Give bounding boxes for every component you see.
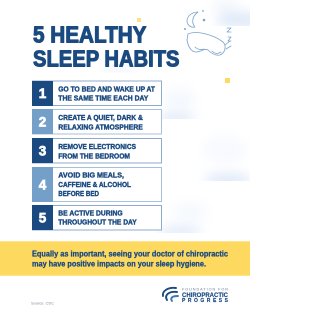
panel: habit 1: GO TO BED AND WAKE UP AT [58,85,155,94]
callout band: Equally as important, seeing your doctor of chiropractic [32,250,228,259]
panel: habit 5: 5 [39,210,47,226]
panel: habit 5: THROUGHOUT THE DAY [58,218,137,227]
panel: habit 3: REMOVE ELECTRONICS [58,142,136,151]
icon: yellow star top [137,18,141,22]
logo: Foundation for Chiropractic Progress: FOUNDATION FOR [182,287,228,291]
panel: habit 5 [32,205,162,230]
panel: habit 1 [32,81,162,106]
panel: habit 4: 4 [39,178,47,192]
logo: Foundation for Chiropractic Progress [163,287,229,304]
callout band [0,241,250,276]
panel: habit 2: CREATE A QUIET, DARK & [58,113,143,122]
panel: habit 3: 3 [39,144,47,158]
title: 5 HEALTHY [33,22,146,48]
panel: habit 1: THE SAME TIME EACH DAY [58,94,148,103]
logo: Foundation for Chiropractic Progress: PROGRESS [182,298,229,304]
icon: moon and sleep mask [184,10,231,55]
panel: habit 1: 1 [39,86,47,101]
panel: habit 5: BE ACTIVE DURING [58,208,123,217]
source note: Source: CDC [31,302,54,306]
panel: habit 2: RELAXING ATMOSPHERE [58,122,143,131]
logo: Foundation for Chiropractic Progress: CHIROPRACTIC [182,292,228,299]
panel: habit 3 [32,138,162,163]
panel: habit 2 [32,109,162,134]
icon: yellow star right [225,78,230,83]
background clouds [109,2,250,233]
panel: habit 4: CAFFEINE & ALCOHOL [58,180,131,189]
callout band: may have positive impacts on your sleep hygiene. [32,260,206,269]
panel: habit 4 [32,167,162,202]
title [33,22,180,72]
panel: habit 3: FROM THE BEDROOM [58,151,130,160]
icon: logo swirl [163,288,178,301]
title: SLEEP HABITS [33,46,180,72]
panel: habit 4: AVOID BIG MEALS, [58,171,124,180]
panel: habit 4: BEFORE BED [58,189,99,198]
panel: habit 2: 2 [39,114,46,130]
